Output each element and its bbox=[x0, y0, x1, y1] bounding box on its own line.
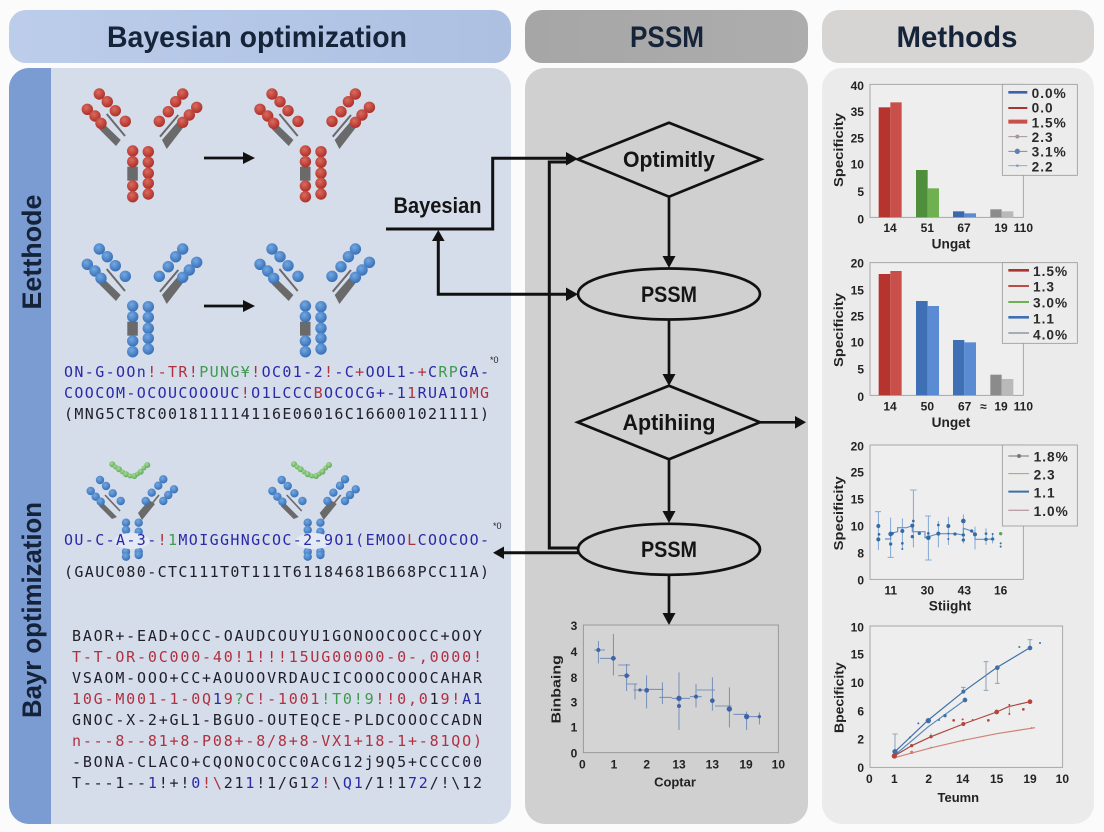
chart: Specificity bar chart 2 bbox=[831, 257, 1077, 430]
sequence block: lower: T-T-OR-0C000-40!1!!!15UG00000-0-,0000! bbox=[72, 648, 482, 666]
header: Methods: Methods bbox=[896, 21, 1018, 54]
chart: binding vs Coptar: 2 bbox=[643, 758, 650, 772]
chart: Specificity scatter vs Stiight: 0 bbox=[857, 573, 864, 587]
label: Bayesian: Bayesian bbox=[394, 193, 482, 218]
legend: chart 2: 1.1 bbox=[1033, 311, 1055, 326]
arrow: blue antibody transition bbox=[204, 300, 255, 312]
chart: Specificity bar chart 2: 5 bbox=[857, 363, 864, 377]
flow node: Aptihiing bbox=[578, 386, 760, 459]
sequence block: lower: VSAOM-OOO+CC+AOUOOVRDAUCICOOOCOOOCAHAR bbox=[72, 669, 483, 687]
legend: chart 2: 1.5% bbox=[1033, 264, 1068, 279]
sequence block: lower: T---1--1!+!0!\211!1/G12!\Q1/1!172/!\12 bbox=[72, 774, 482, 792]
chart: Bpecificity line chart vs Teumn: 10 bbox=[1056, 772, 1069, 786]
legend: chart 2 bbox=[1002, 263, 1077, 343]
legend: chart 2: 3.0% bbox=[1033, 296, 1068, 311]
chart: Specificity scatter vs Stiight: 8 bbox=[857, 547, 864, 561]
antibody: blue end bbox=[254, 243, 375, 357]
chart: Specificity scatter vs Stiight: Stiight bbox=[929, 599, 972, 614]
chart: Specificity bar chart 1: 0 bbox=[857, 212, 864, 226]
legend: chart 1 bbox=[1002, 84, 1077, 175]
chart: Bpecificity line chart vs Teumn: 15 bbox=[851, 648, 864, 662]
chart: binding vs Coptar: 19 bbox=[739, 758, 753, 772]
chart: binding vs Coptar: 1 bbox=[571, 721, 578, 735]
chart: binding vs Coptar: 4 bbox=[571, 645, 578, 659]
chart: Specificity bar chart 2: 25 bbox=[851, 309, 864, 323]
chart: Specificity bar chart 1: 67 bbox=[957, 221, 971, 235]
side label: Eetthode: Eetthode bbox=[17, 194, 47, 310]
chart: binding vs Coptar: 0 bbox=[571, 747, 578, 761]
chart: Specificity scatter vs Stiight: 43 bbox=[958, 583, 971, 597]
chart: binding vs Coptar bbox=[549, 619, 785, 790]
arrow: red antibody transition bbox=[204, 152, 255, 164]
legend: chart 1: 2.3 bbox=[1032, 130, 1054, 145]
header: Bayesian optimization bbox=[9, 10, 511, 63]
chart: Specificity scatter vs Stiight: 30 bbox=[921, 583, 934, 597]
chart: Bpecificity line chart vs Teumn: 19 bbox=[1023, 772, 1037, 786]
label halo: right bbox=[295, 533, 331, 549]
arrow: Optimitly to PSSM bbox=[662, 197, 676, 268]
sequence block: upper: COOCOM-OCOUCOOOUC!O1LCCCBOCOCG+-11RUA1OMG bbox=[64, 384, 489, 402]
arrow: PSSM feedback to Bayesian bbox=[432, 230, 578, 301]
panel: PSSM bbox=[525, 68, 808, 824]
chart: Specificity scatter vs Stiight bbox=[831, 439, 1077, 614]
panel: Methods bbox=[822, 68, 1094, 824]
chart: Specificity bar chart 2: ≈ bbox=[980, 399, 987, 413]
chart: Bpecificity line chart vs Teumn: Bpecificity bbox=[832, 662, 847, 733]
antibody with green ligand: right bbox=[268, 461, 360, 561]
chart: binding vs Coptar: Coptar bbox=[654, 775, 696, 790]
chart: binding vs Coptar: 10 bbox=[772, 758, 785, 772]
sequence block: lower: BAOR+-EAD+OCC-OAUDCOUYU1GONOOCOOCC+OOY bbox=[72, 627, 482, 645]
antibody: blue start bbox=[82, 243, 202, 357]
arrow: lower PSSM loop back to Optimitly bbox=[549, 162, 578, 548]
arrow: lower PSSM to sequences bbox=[493, 546, 578, 559]
chart: Specificity bar chart 2: 10 bbox=[851, 336, 864, 350]
chart: Specificity bar chart 2: 110 bbox=[1014, 399, 1033, 413]
chart: Specificity bar chart 2: 50 bbox=[921, 399, 934, 413]
chart: Bpecificity line chart vs Teumn: 10 bbox=[851, 621, 864, 635]
chart: Specificity bar chart 2: 20 bbox=[851, 257, 864, 271]
arrow: PSSM to binding chart bbox=[662, 575, 676, 625]
sequence block: lower bbox=[72, 627, 483, 792]
chart: Specificity bar chart 1: 19 bbox=[994, 221, 1008, 235]
flow node: PSSM lower bbox=[578, 524, 760, 575]
arrow: PSSM to Aptihiing bbox=[662, 320, 676, 386]
legend: chart 2: 1.3 bbox=[1033, 280, 1055, 295]
legend: chart 3: 1.1 bbox=[1034, 485, 1056, 500]
chart: Specificity scatter vs Stiight: 16 bbox=[994, 583, 1008, 597]
arrow: Bayesian to Optimitly bbox=[386, 152, 578, 229]
chart: Specificity bar chart 1: 25 bbox=[851, 132, 864, 146]
chart: binding vs Coptar: 13 bbox=[672, 758, 686, 772]
arrow: Aptihiing to Methods bbox=[760, 416, 806, 429]
legend: chart 1: 2.2 bbox=[1032, 159, 1054, 174]
chart: Bpecificity line chart vs Teumn: 2 bbox=[857, 733, 864, 747]
chart: Specificity bar chart 2: 19 bbox=[994, 399, 1008, 413]
chart: Specificity scatter vs Stiight: 20 bbox=[851, 439, 864, 453]
chart: Bpecificity line chart vs Teumn: 10 bbox=[851, 676, 864, 690]
legend: chart 2: 4.0% bbox=[1033, 327, 1068, 342]
sequence block: middle: (GAUC080-CTC111T0T111T61184681B668PCC11A) bbox=[64, 563, 489, 581]
chart: Specificity scatter vs Stiight: 11 bbox=[884, 583, 897, 597]
chart: Specificity bar chart 2: 14 bbox=[883, 399, 897, 413]
chart: binding vs Coptar: 13 bbox=[706, 758, 719, 772]
header: Bayesian optimization: Bayesian optimization bbox=[107, 21, 407, 54]
sequence block: middle: *0 bbox=[493, 521, 502, 531]
legend: chart 3: 1.8% bbox=[1034, 450, 1069, 465]
sequence block: lower: -BONA-CLACO+CQONOCOCC0ACG12j9Q5+CCCC00 bbox=[72, 753, 482, 771]
chart: Specificity bar chart 1: 10 bbox=[851, 158, 864, 172]
side band bbox=[9, 68, 51, 824]
chart: Bpecificity line chart vs Teumn bbox=[832, 621, 1069, 805]
chart: Bpecificity line chart vs Teumn: 0 bbox=[866, 772, 873, 786]
flow node: Optimitly: Optimitly bbox=[623, 147, 716, 172]
flow node: Aptihiing: Aptihiing bbox=[622, 410, 716, 435]
chart: Specificity bar chart 2: 67 bbox=[958, 399, 972, 413]
chart: Bpecificity line chart vs Teumn: Teumn bbox=[938, 790, 979, 805]
chart: Specificity bar chart 2: 15 bbox=[851, 283, 864, 297]
chart: Specificity bar chart 1: Ungat bbox=[932, 236, 971, 251]
sequence block: lower: n---8--81+8-P08+-8/8+8-VX1+18-1+-81QO) bbox=[72, 732, 482, 750]
legend: chart 1: 0.0% bbox=[1032, 86, 1067, 101]
chart: Specificity bar chart 1: 40 bbox=[851, 79, 864, 93]
sequence block: upper: (MNG5CT8C001811114116E06016C166001021111) bbox=[64, 405, 489, 423]
sequence block: middle bbox=[64, 521, 502, 581]
chart: Specificity bar chart 1: 5 bbox=[857, 185, 864, 199]
chart: Specificity bar chart 1 bbox=[831, 79, 1077, 251]
chart: Bpecificity line chart vs Teumn: 15 bbox=[990, 772, 1004, 786]
legend: chart 1: 1.5% bbox=[1032, 115, 1067, 130]
flow node: PSSM upper bbox=[578, 268, 760, 320]
antibody: red end bbox=[254, 88, 375, 202]
legend: chart 1: 0.0 bbox=[1032, 101, 1054, 116]
chart: binding vs Coptar: 0 bbox=[579, 758, 586, 772]
chart: Bpecificity line chart vs Teumn: 2 bbox=[925, 772, 932, 786]
sequence block: middle: OU-C-A-3-!1MOIGGHNGCOC-2-9O1(EMOOLCOOCOO- bbox=[64, 531, 489, 549]
chart: binding vs Coptar: 3 bbox=[571, 619, 578, 633]
chart: Bpecificity line chart vs Teumn: 0 bbox=[857, 761, 864, 775]
chart: Bpecificity line chart vs Teumn: 1 bbox=[891, 772, 898, 786]
sequence block: upper: *0 bbox=[490, 355, 499, 365]
sequence block: lower: 10G-M001-1-0Q19?C!-1001!T0!9!!0,019!A1 bbox=[72, 690, 482, 708]
legend: chart 3 bbox=[1002, 445, 1077, 526]
chart: Specificity bar chart 1: 51 bbox=[921, 221, 934, 235]
chart: Specificity bar chart 1: 35 bbox=[851, 105, 864, 119]
flow node: Optimitly bbox=[578, 123, 761, 197]
sequence block: upper bbox=[64, 355, 499, 423]
header: PSSM bbox=[525, 10, 808, 63]
chart: binding vs Coptar: 8 bbox=[571, 671, 578, 685]
side label: Bayr optimization: Bayr optimization bbox=[17, 502, 47, 718]
chart: Specificity scatter vs Stiight: 10 bbox=[851, 519, 864, 533]
header: Methods bbox=[822, 10, 1094, 63]
legend: chart 3: 1.0% bbox=[1034, 504, 1069, 519]
chart: Specificity scatter vs Stiight: 15 bbox=[851, 492, 864, 506]
chart: Specificity bar chart 1: Specificity bbox=[831, 112, 846, 187]
chart: Bpecificity line chart vs Teumn: 6 bbox=[857, 704, 864, 718]
label halo: left bbox=[114, 533, 150, 549]
chart: Specificity bar chart 1: 14 bbox=[883, 221, 897, 235]
panel: Bayesian optimization bbox=[9, 68, 511, 824]
header: PSSM: PSSM bbox=[630, 21, 704, 54]
chart: Specificity bar chart 2: 0 bbox=[857, 390, 864, 404]
legend: chart 1: 3.1% bbox=[1032, 145, 1067, 160]
sequence block: lower: GNOC-X-2+GL1-BGUO-OUTEQCE-PLDCOOOCCADN bbox=[72, 711, 482, 729]
chart: Specificity bar chart 1: 110 bbox=[1014, 221, 1033, 235]
chart: binding vs Coptar: Binbaing bbox=[549, 655, 564, 723]
flow node: PSSM upper: PSSM bbox=[641, 282, 697, 307]
chart: Specificity bar chart 2: Unget bbox=[932, 415, 971, 430]
chart: binding vs Coptar: 3 bbox=[571, 696, 578, 710]
chart: binding vs Coptar: 1 bbox=[611, 758, 618, 772]
antibody with green ligand: left bbox=[86, 461, 178, 561]
antibody: red start bbox=[82, 88, 202, 202]
chart: Specificity scatter vs Stiight: 25 bbox=[851, 466, 864, 480]
chart: Bpecificity line chart vs Teumn: 14 bbox=[956, 772, 970, 786]
flow node: PSSM lower: PSSM bbox=[641, 537, 697, 562]
sequence block: upper: ON-G-OOn!-TR!PUNG¥!OC01-2!-C+OOL1-+CRPGA- bbox=[64, 363, 489, 381]
legend: chart 3: 2.3 bbox=[1034, 467, 1056, 482]
arrow: Aptihiing to PSSM bbox=[662, 459, 676, 523]
chart: Specificity scatter vs Stiight: Specificity bbox=[831, 475, 846, 550]
chart: Specificity bar chart 2: Specificity bbox=[831, 292, 846, 367]
